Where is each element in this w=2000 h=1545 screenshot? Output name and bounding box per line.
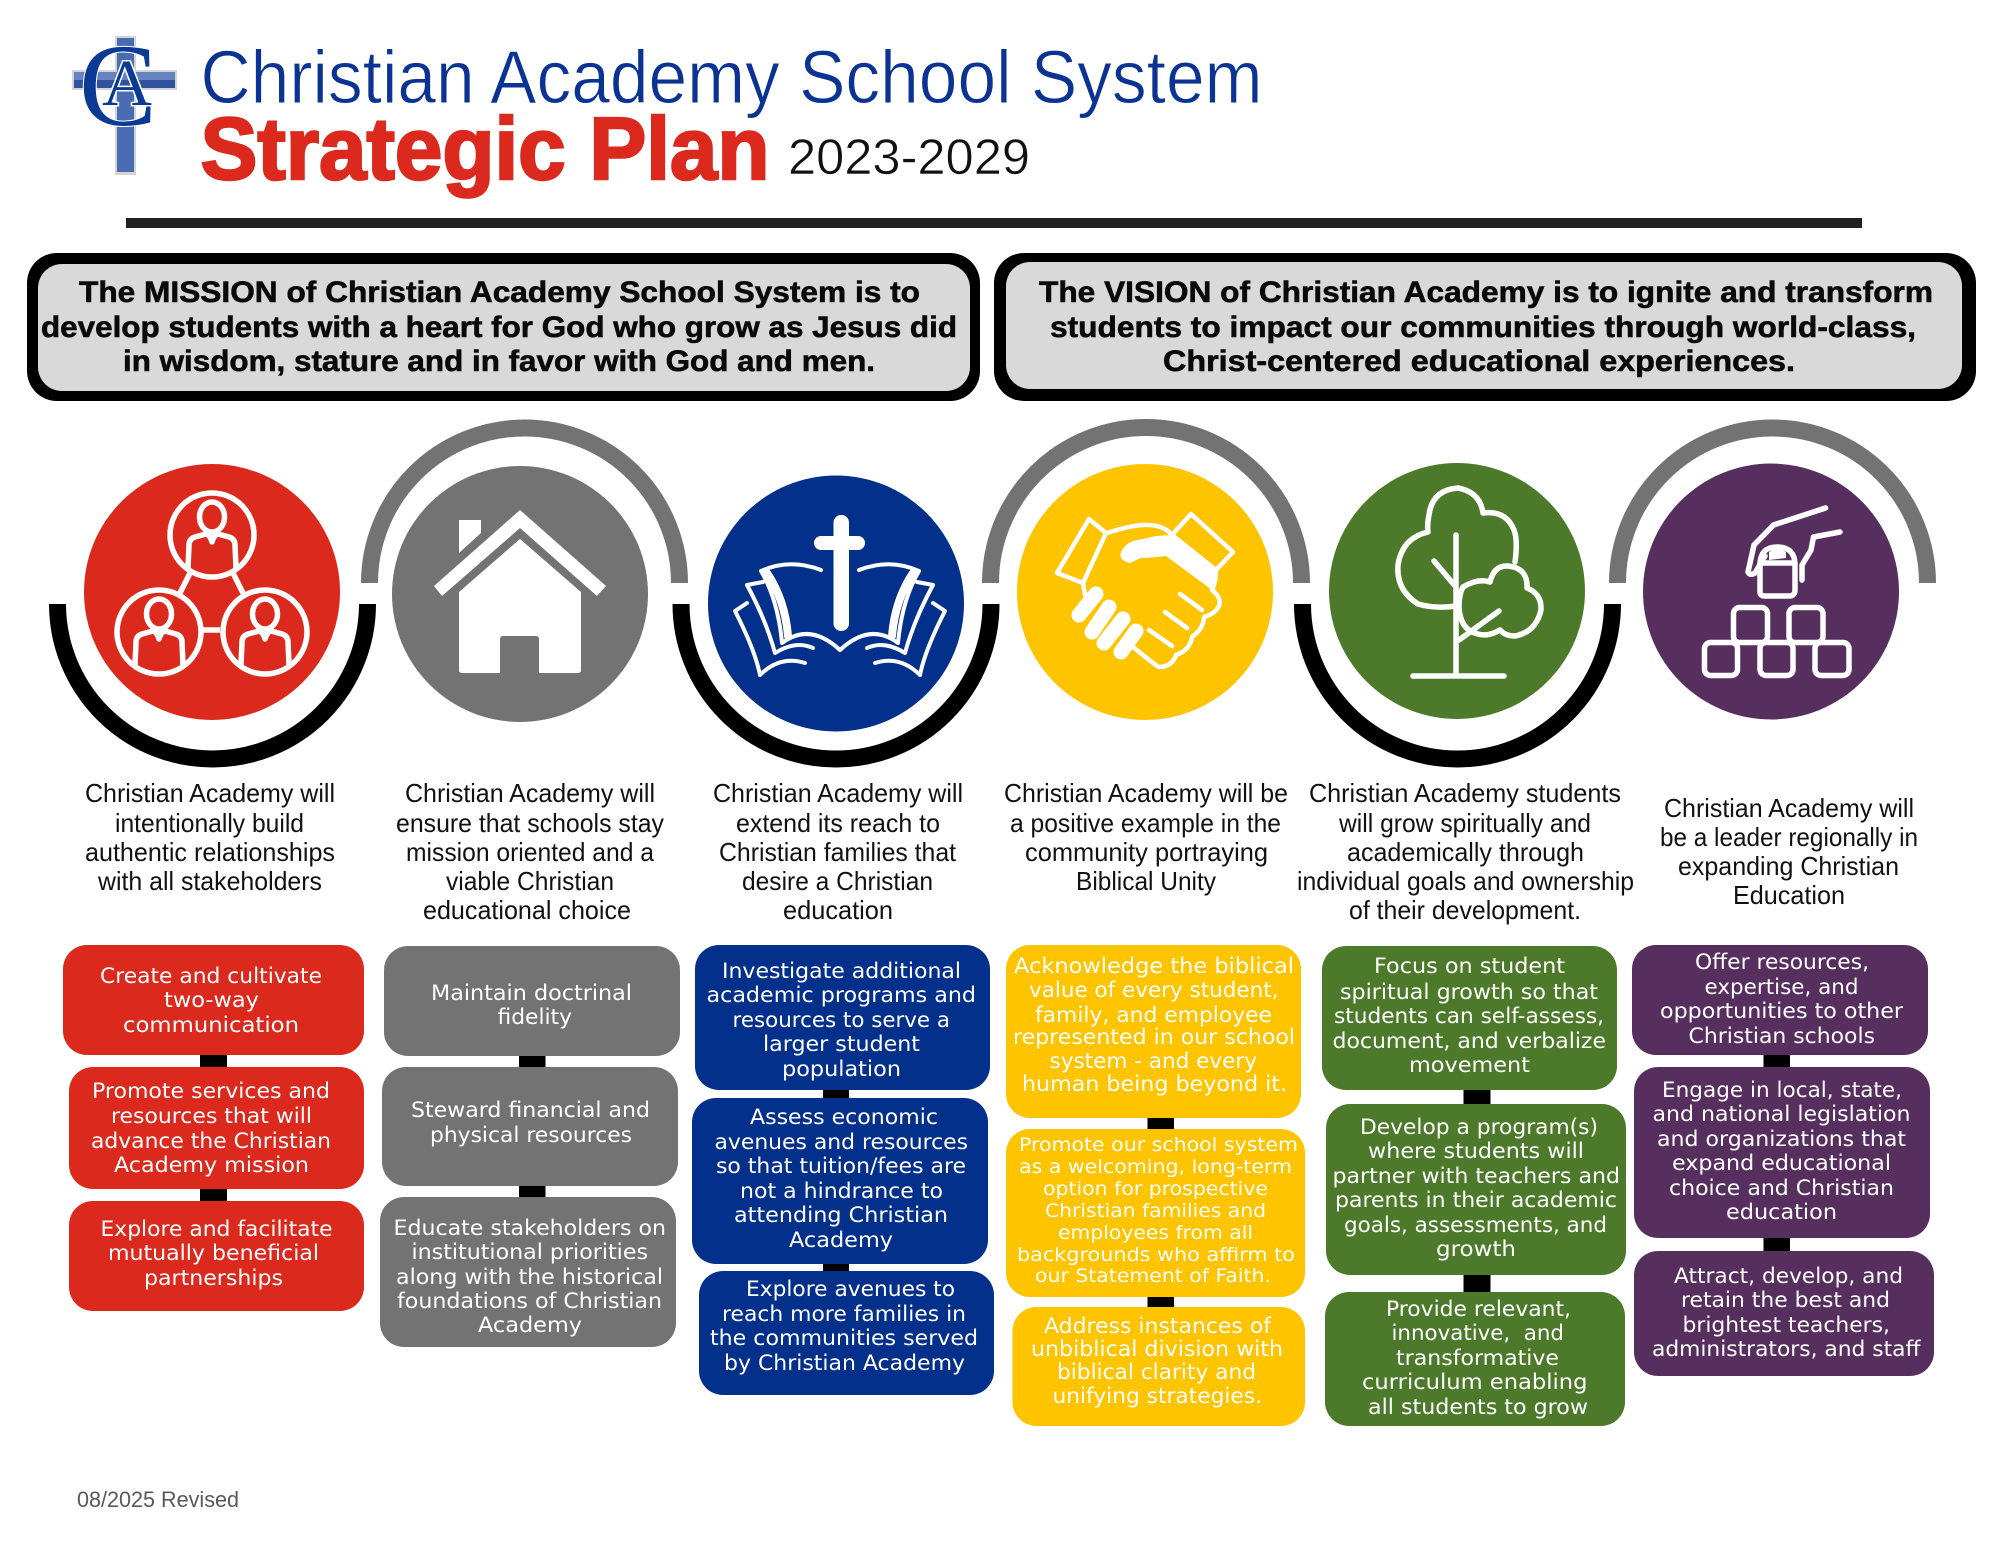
column 5 objective xyxy=(1297,778,1634,925)
strategy box 1: system - and every xyxy=(1050,1049,1257,1073)
column 6 objective: Education xyxy=(1733,880,1845,910)
strategy box 1: family, and employee xyxy=(1035,1003,1272,1027)
strategy box 1: Christian schools xyxy=(1688,1024,1875,1048)
logo: cross with CA monogram: A xyxy=(102,47,152,120)
strategy box 1: Acknowledge the biblical xyxy=(1014,954,1294,978)
strategy box 1: communication xyxy=(123,1013,299,1037)
strategy box 2 xyxy=(1006,1129,1305,1297)
heading: Strategic Plan: Strategic Plan xyxy=(200,99,770,198)
strategy box 2: physical resources xyxy=(430,1123,632,1147)
strategy box 3: brightest teachers, xyxy=(1682,1313,1890,1337)
strategy box 1: Investigate additional xyxy=(722,959,961,983)
strategy box 1: spiritual growth so that xyxy=(1340,980,1598,1004)
strategy box 3: unifying strategies. xyxy=(1052,1384,1262,1408)
column 3 strategies: blue xyxy=(692,945,994,1395)
strategy box 2: education xyxy=(1726,1200,1837,1224)
column 5 objective: will grow spiritually and xyxy=(1338,808,1591,838)
column 5 objective: of their development. xyxy=(1349,895,1581,925)
strategy box 3: Educate stakeholders on xyxy=(394,1216,666,1240)
strategy box 3: mutually beneficial xyxy=(108,1241,319,1265)
strategy box 3: Academy xyxy=(478,1313,582,1337)
column 2 objective: ensure that schools stay xyxy=(396,808,664,838)
column 4 icon: handshake xyxy=(990,428,1302,720)
strategy box 3: Explore avenues to xyxy=(746,1277,955,1301)
strategy box 3 xyxy=(1012,1307,1305,1426)
strategy box 2 xyxy=(1634,1067,1930,1238)
column 4 objective xyxy=(1004,778,1288,896)
strategy box 2: Academy xyxy=(789,1228,893,1252)
column 1 objective: authentic relationships xyxy=(85,837,335,867)
panel: mission statement xyxy=(27,253,980,401)
column 2 objective: viable Christian xyxy=(446,866,614,896)
column 1 objective: with all stakeholders xyxy=(97,866,322,896)
strategy box 2: Promote our school system xyxy=(1019,1134,1298,1156)
strategy box 3 xyxy=(1325,1292,1625,1426)
column 6 strategies: purple xyxy=(1632,945,1934,1376)
strategy box 3 xyxy=(69,1201,364,1311)
strategy box 3: partnerships xyxy=(144,1266,283,1290)
strategy box 1 xyxy=(1006,945,1301,1118)
strategy box 1 xyxy=(384,946,680,1056)
strategy box 2: avenues and resources xyxy=(714,1130,968,1154)
strategy box 3: reach more families in xyxy=(722,1302,966,1326)
strategy box 3: retain the best and xyxy=(1681,1288,1890,1312)
strategy box 3: Attract, develop, and xyxy=(1674,1264,1903,1288)
panel: mission statement: develop students with a heart for God who grow as Jesus did xyxy=(41,311,957,344)
strategy box 2: and national legislation xyxy=(1652,1102,1910,1126)
strategy box 3: transformative xyxy=(1396,1346,1559,1370)
strategy box 1: resources to serve a xyxy=(732,1008,950,1032)
strategy box 2: not a hindrance to xyxy=(740,1179,943,1203)
strategy box 2: advance the Christian xyxy=(91,1129,331,1153)
strategy box 2: where students will xyxy=(1368,1139,1584,1163)
strategy box 1 xyxy=(1632,945,1928,1055)
strategy box 1: population xyxy=(782,1057,901,1081)
column 5 objective: Christian Academy students xyxy=(1309,778,1621,808)
strategy box 1 xyxy=(63,945,364,1055)
strategy box 2: resources that will xyxy=(111,1104,312,1128)
strategy box 2: as a welcoming, long-term xyxy=(1019,1156,1292,1178)
strategy box 1 xyxy=(1322,946,1617,1090)
strategy box 3 xyxy=(380,1197,676,1347)
strategy box 2: our Statement of Faith. xyxy=(1035,1265,1271,1287)
strategy box 2: Academy mission xyxy=(114,1153,309,1177)
strategy box 1: Maintain doctrinal xyxy=(431,981,632,1005)
column 3 objective: desire a Christian xyxy=(742,866,933,896)
column 3 objective: Christian families that xyxy=(719,837,957,867)
column 5 icon: growing tree xyxy=(1302,463,1612,759)
strategy box 2: Engage in local, state, xyxy=(1662,1078,1902,1102)
strategy box 3: all students to grow xyxy=(1368,1395,1588,1419)
column 2 strategies: gray xyxy=(380,946,680,1347)
strategy box 3: unbiblical division with xyxy=(1031,1337,1283,1361)
column 4 strategies: yellow xyxy=(1006,945,1305,1426)
strategy box 1 xyxy=(695,945,990,1090)
column 3 icon: open Bible with cross xyxy=(681,476,991,759)
panel: vision statement: Christ-centered educational experiences. xyxy=(1163,345,1795,378)
strategy box 1: represented in our school xyxy=(1013,1025,1295,1049)
strategy box 2: backgrounds who affirm to xyxy=(1017,1244,1295,1266)
column 4 objective: a positive example in the xyxy=(1010,808,1281,838)
strategy box 1: human being beyond it. xyxy=(1022,1072,1287,1096)
column 1 strategies: red xyxy=(63,945,364,1311)
column 4 objective: community portraying xyxy=(1025,837,1268,867)
strategy box 1: Focus on student xyxy=(1374,954,1565,978)
column 6 icon: hand stacking blocks xyxy=(1618,428,1928,720)
column 6 objective: expanding Christian xyxy=(1678,851,1899,881)
strategy box 2: choice and Christian xyxy=(1669,1176,1894,1200)
panel: vision statement: The VISION of Christian Academy is to ignite and transform xyxy=(1039,276,1933,309)
strategy box 3: Provide relevant, xyxy=(1386,1297,1571,1321)
column 5 objective: individual goals and ownership xyxy=(1297,866,1634,896)
strategy box 2: parents in their academic xyxy=(1335,1188,1617,1212)
strategy box 3: the communities served xyxy=(710,1326,978,1350)
heading: plan years: 2023-2029 xyxy=(788,129,1030,185)
strategy box 2: so that tuition/fees are xyxy=(716,1154,966,1178)
column 6 objective: Christian Academy will xyxy=(1664,793,1914,823)
strategy box 2 xyxy=(692,1098,988,1264)
column 5 strategies: green xyxy=(1322,946,1626,1426)
strategy box 2: Assess economic xyxy=(750,1105,938,1129)
strategy box 3: by Christian Academy xyxy=(724,1351,965,1375)
panel: mission statement: in wisdom, stature and in favor with God and men. xyxy=(123,345,875,378)
column 2 objective: Christian Academy will xyxy=(405,778,655,808)
logo: cross with CA monogram xyxy=(72,20,177,175)
strategy box 2: Promote services and xyxy=(92,1079,330,1103)
strategy box 2 xyxy=(382,1067,678,1186)
column 2 objective: educational choice xyxy=(423,895,631,925)
strategy box 3: foundations of Christian xyxy=(397,1289,662,1313)
strategy box 2: growth xyxy=(1436,1237,1516,1261)
column 1 objective: intentionally build xyxy=(115,808,304,838)
panel: vision statement: students to impact our communities through world-class, xyxy=(1050,311,1916,344)
column 3 objective: extend its reach to xyxy=(736,808,940,838)
strategy box 2: partner with teachers and xyxy=(1332,1164,1620,1188)
column 2 objective: mission oriented and a xyxy=(406,837,655,867)
strategy box 2: attending Christian xyxy=(734,1203,948,1227)
strategy box 1: academic programs and xyxy=(706,983,976,1007)
strategy box 2 xyxy=(1326,1104,1626,1275)
strategy box 1: opportunities to other xyxy=(1660,999,1903,1023)
strategy box 2: and organizations that xyxy=(1657,1127,1906,1151)
strategy box 3: Address instances of xyxy=(1044,1314,1272,1338)
strategy box 2 xyxy=(69,1067,364,1189)
column 1 icon: relationships xyxy=(58,464,368,759)
strategy box 1: document, and verbalize xyxy=(1332,1029,1606,1053)
strategy box 3 xyxy=(699,1271,994,1395)
strategy box 1: two-way xyxy=(164,988,259,1012)
column 6 objective xyxy=(1660,793,1918,910)
column 1 objective: Christian Academy will xyxy=(85,778,335,808)
strategy box 2: employees from all xyxy=(1058,1222,1253,1244)
column 3 objective: Christian Academy will xyxy=(713,778,963,808)
logo: cross with CA monogram: C xyxy=(79,20,157,151)
strategy box 1: value of every student, xyxy=(1029,978,1278,1002)
column 5 objective: academically through xyxy=(1347,837,1584,867)
strategy box 3: administrators, and staff xyxy=(1652,1337,1921,1361)
column 2 objective xyxy=(396,778,664,925)
strategy box 1: expertise, and xyxy=(1704,975,1858,999)
column 6 objective: be a leader regionally in xyxy=(1660,822,1918,852)
strategy box 3 xyxy=(1634,1251,1934,1376)
strategy box 1: students can self-assess, xyxy=(1334,1004,1604,1028)
panel: mission statement: The MISSION of Christian Academy School System is to xyxy=(79,276,920,309)
panel: vision statement xyxy=(994,253,1976,401)
strategy box 3: curriculum enabling xyxy=(1362,1370,1588,1394)
strategy box 3: innovative, and xyxy=(1392,1321,1564,1345)
strategy box 2: expand educational xyxy=(1672,1151,1891,1175)
column 1 objective xyxy=(85,778,335,896)
strategy box 3: along with the historical xyxy=(396,1265,663,1289)
strategy box 3: Explore and facilitate xyxy=(100,1217,332,1241)
strategy box 2: Steward financial and xyxy=(411,1098,650,1122)
strategy box 3: biblical clarity and xyxy=(1057,1360,1256,1384)
strategy box 2: Develop a program(s) xyxy=(1360,1115,1598,1139)
strategy box 2: Christian families and xyxy=(1045,1200,1266,1222)
column 4 objective: Biblical Unity xyxy=(1076,866,1216,896)
strategy box 1: Create and cultivate xyxy=(100,964,322,988)
strategy box 1: fidelity xyxy=(498,1005,572,1029)
strategy box 2: goals, assessments, and xyxy=(1344,1213,1607,1237)
footer: revision date: 08/2025 Revised xyxy=(77,1487,239,1512)
title: Christian Academy School System: Christian Academy School System xyxy=(200,35,1262,119)
column 3 objective: education xyxy=(783,895,893,925)
strategy box 2: option for prospective xyxy=(1043,1178,1268,1200)
column 4 objective: Christian Academy will be xyxy=(1004,778,1288,808)
strategy box 1: movement xyxy=(1409,1053,1530,1077)
column 3 objective xyxy=(713,778,963,925)
strategy box 1: larger student xyxy=(763,1032,920,1056)
strategy box 1: Offer resources, xyxy=(1695,950,1869,974)
column 2 icon: house xyxy=(370,428,680,722)
strategy box 3: institutional priorities xyxy=(412,1240,648,1264)
